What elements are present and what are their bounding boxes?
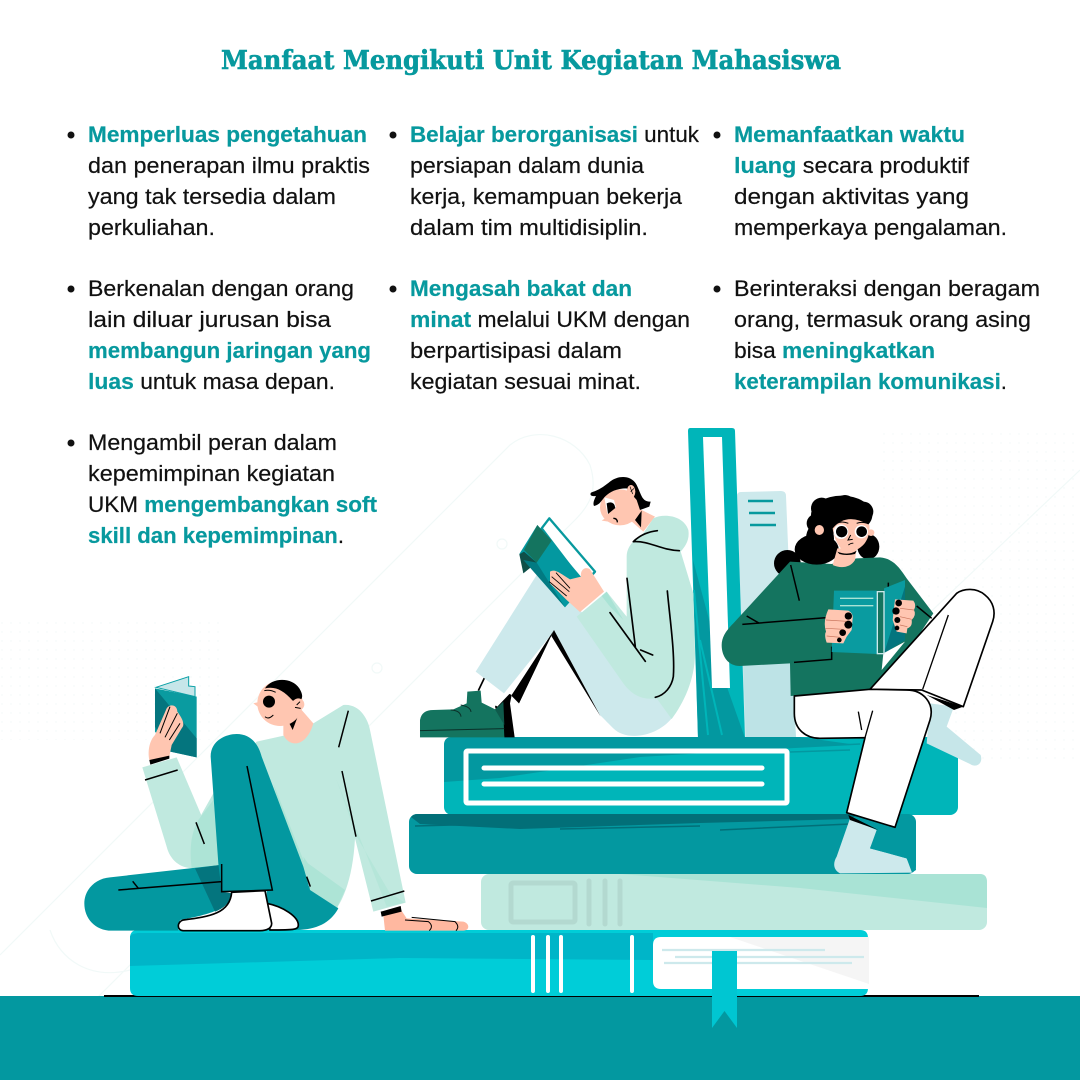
ground band [0,996,1080,1080]
bullet: mengasah bakat: berpartisipasi dalam [410,338,622,363]
book 2: dark teal [409,814,916,874]
bullet: memperluas pengetahuan: perkuliahan. [88,215,215,240]
bullet: membangun jaringan: lain diluar jurusan bisa [88,307,332,332]
bullet: soft skill: Mengambil peran dalam [88,430,337,455]
bullet: belajar berorganisasi: kerja, kemampuan bekerja [410,184,683,209]
reading book [832,591,877,654]
neck [833,548,857,567]
torso sleeve [191,705,406,912]
neck [283,710,313,743]
left hand [825,609,853,643]
hand [550,568,604,612]
hoodie [577,516,695,719]
hair [265,680,302,701]
bullet: belajar berorganisasi: dalam tim multidisiplin. [410,215,648,240]
bullet: memperluas pengetahuan [68,122,370,240]
face [600,489,640,525]
bullet: membangun jaringan: luas untuk masa depan. [88,369,335,394]
hair [590,477,651,510]
front leg [211,734,310,892]
book 1: top teal [444,737,958,815]
bullet: soft skill [68,430,378,548]
bullet: mengasah bakat [390,276,690,394]
open book [542,518,595,584]
shoe [420,691,504,737]
facial features [263,696,275,708]
right hand [893,599,915,633]
tall teal book [688,428,745,738]
person: woman sitting with book [722,495,994,873]
neck [630,508,655,532]
front foot [834,818,913,873]
bullet: keterampilan komunikasi [714,276,1040,394]
book stack [130,737,987,1028]
bullet: memanfaatkan waktu: memperkaya pengalaman. [734,215,1007,240]
bullet: belajar berorganisasi: persiapan dalam dunia [410,153,645,178]
bullet: mengasah bakat: Mengasah bakat dan [410,276,632,301]
bullet: keterampilan komunikasi: bisa meningkatkan [734,338,935,363]
bullet: membangun jaringan: membangun jaringan yang [88,338,371,363]
back leg black trousers [495,630,554,737]
hand-held book [156,677,195,697]
sweater lines [742,565,932,662]
head [257,681,303,726]
bullet: memanfaatkan waktu: luang secara produktif [734,153,970,178]
text column: left benefits [68,122,378,548]
hip [267,887,338,930]
bullet: belajar berorganisasi [390,122,700,240]
title: Manfaat Mengikuti Unit Kegiatan Mahasiswa [221,46,841,76]
bullet: keterampilan komunikasi: keterampilan komunikasi. [734,369,1007,394]
bullet: membangun jaringan: Berkenalan dengan orang [88,276,354,301]
hair back [774,495,879,577]
pale upright book [737,491,796,738]
sock [477,677,510,707]
back thigh [84,865,232,931]
bookmark ribbon [712,951,737,1028]
bullet: memanfaatkan waktu: Memanfaatkan waktu [734,122,965,147]
bullet: memperluas pengetahuan: yang tak tersedia dalam [88,184,336,209]
person: man sitting reading [84,677,468,931]
feet [267,903,298,930]
bullet: memperluas pengetahuan: Memperluas pengetahuan [88,122,367,147]
face [833,519,869,552]
text column: right benefits [714,122,1040,394]
back leg foot [927,703,981,766]
raised hand [149,705,183,760]
person: student reading against books [420,477,695,737]
clothing lines [118,711,404,901]
bullet: membangun jaringan [68,276,371,394]
bullet: memperluas pengetahuan: dan penerapan ilmu praktis [88,153,370,178]
sweater [722,557,933,696]
bullet: soft skill: UKM mengembangkan soft [88,492,378,517]
bullet: keterampilan komunikasi: Berinteraksi dengan beragam [734,276,1040,301]
bullet: mengasah bakat: kegiatan sesuai minat. [410,369,641,394]
bullet: soft skill: kepemimpinan kegiatan [88,461,335,486]
bullet: belajar berorganisasi: Belajar berorganisasi untuk [410,122,700,147]
bullet: keterampilan komunikasi: orang, termasuk orang asing [734,307,1031,332]
bullet: memanfaatkan waktu [714,122,1007,240]
text column: middle benefits [390,122,700,394]
book 4: bottom cyan [130,930,869,996]
trousers [476,575,672,736]
trousers top leg [870,589,994,707]
bullet: memanfaatkan waktu: dengan aktivitas yang [734,184,969,209]
upright books behind [688,428,796,738]
right hand [383,908,468,931]
bullet: soft skill: skill dan kepemimpinan. [88,523,344,548]
trousers front leg [794,689,931,827]
raised arm [142,757,203,868]
bullet: mengasah bakat: minat melalui UKM dengan [410,307,690,332]
hair front bun [795,534,839,565]
book 3: pale mint [481,874,987,930]
